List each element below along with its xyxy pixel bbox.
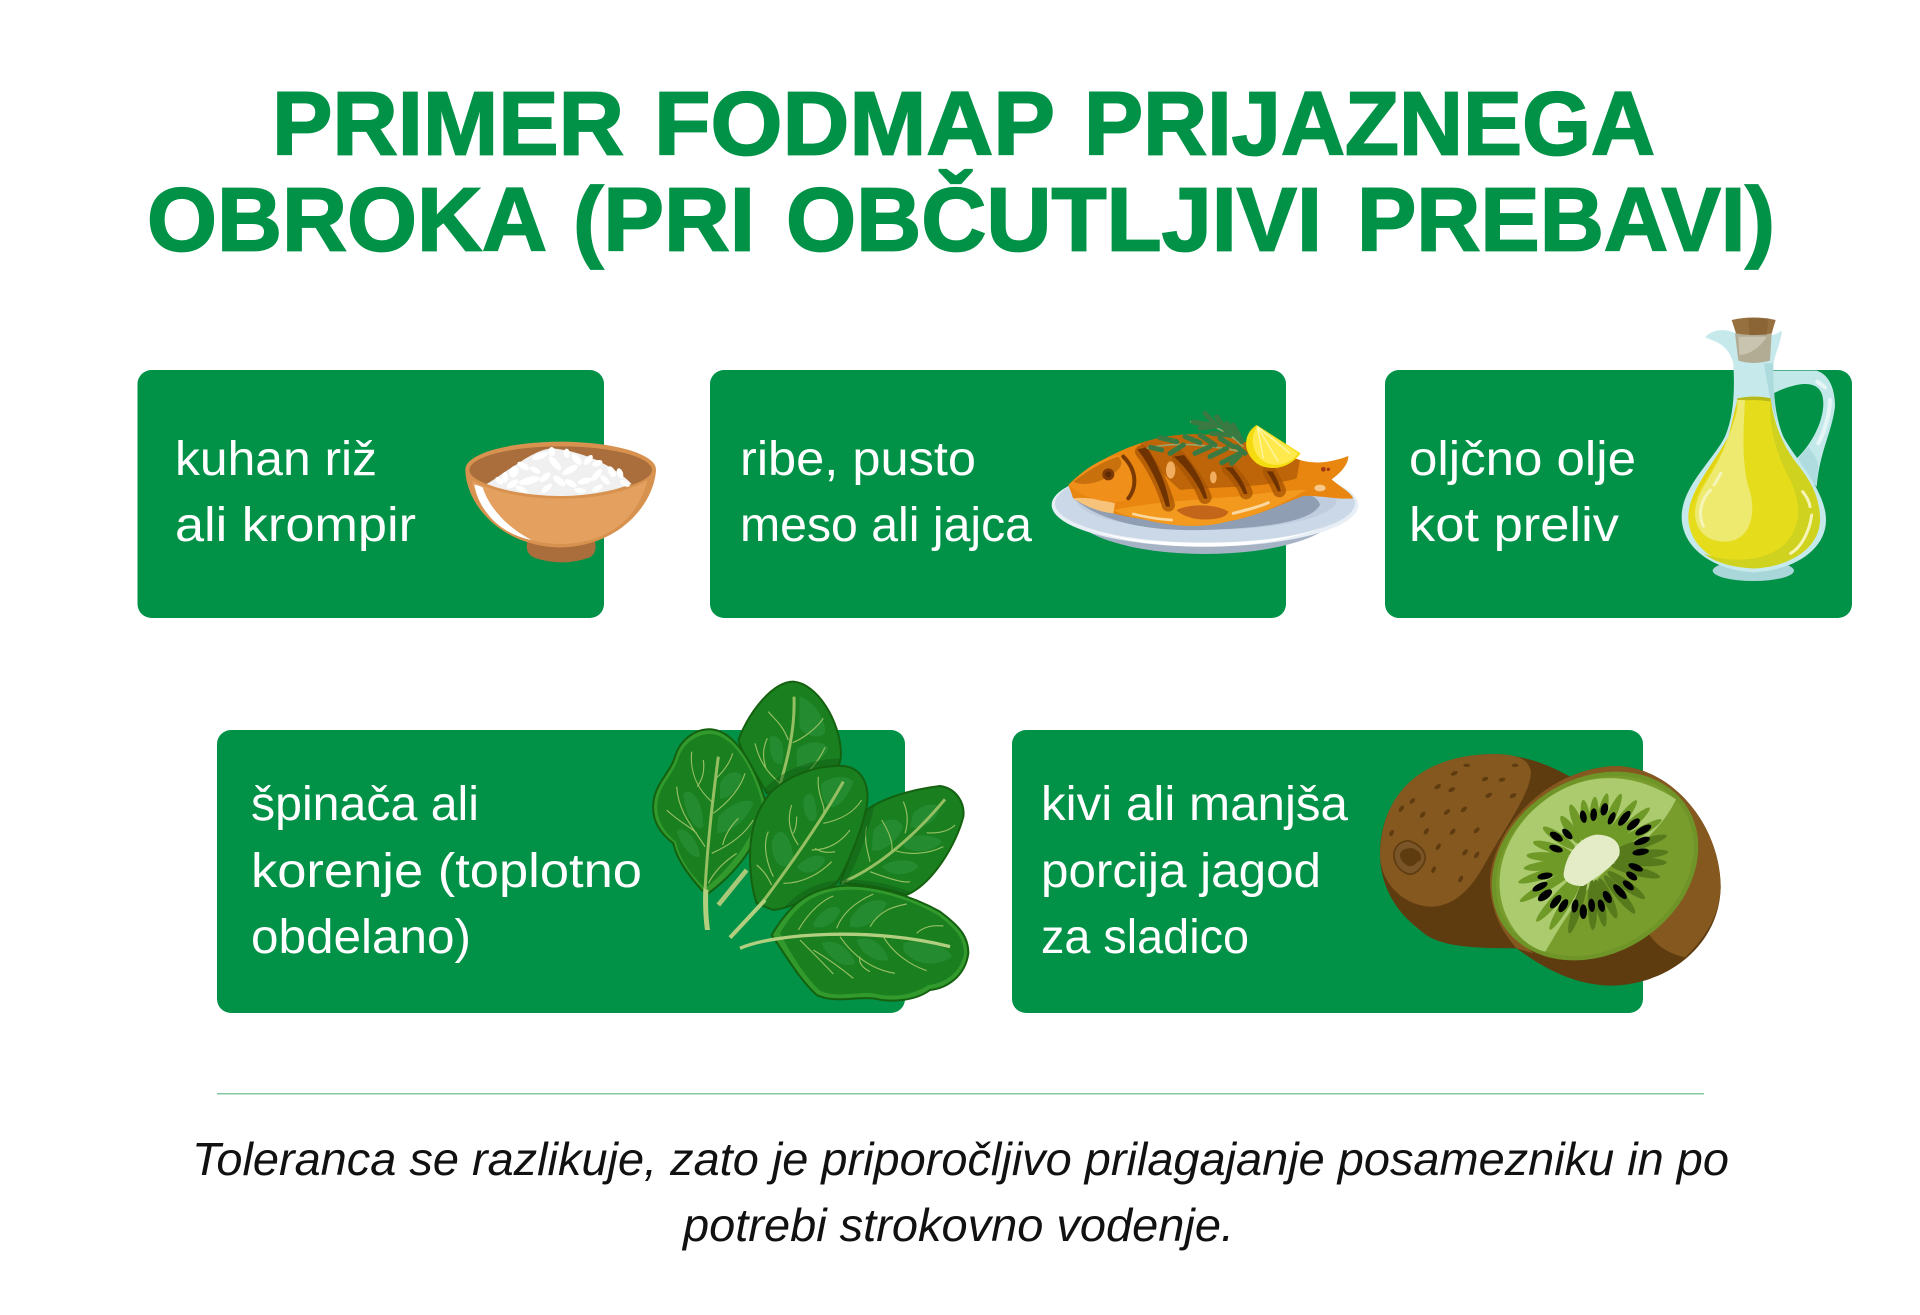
panel: kiwi or strawberries bbox=[1012, 730, 1734, 1013]
icon: kiwi fruit bbox=[1380, 733, 1734, 999]
panel: olive oil: oljčno olje bbox=[1409, 433, 1636, 486]
panel: fish, meat or eggs: meso ali jajca bbox=[740, 499, 1032, 552]
panel: spinach or carrots: špinača ali bbox=[251, 778, 479, 831]
panel: fish, meat or eggs bbox=[710, 370, 1358, 618]
title: PRIMER bbox=[272, 74, 624, 174]
panel: rice or potato bbox=[138, 370, 656, 618]
panel: spinach or carrots: korenje (toplotno bbox=[251, 845, 642, 898]
icon: grilled fish on a plate bbox=[1052, 413, 1358, 554]
panel: spinach or carrots bbox=[217, 682, 968, 1013]
icon: rice bowl bbox=[465, 442, 656, 562]
panel: olive oil bbox=[1385, 317, 1852, 618]
panel: olive oil: kot preliv bbox=[1409, 499, 1619, 552]
title: OBROKA bbox=[147, 170, 547, 270]
footer note: Toleranca se razlikuje, zato je priporočljivo prilagajanje posamezniku in po bbox=[192, 1133, 1729, 1185]
panel: kiwi or strawberries: za sladico bbox=[1041, 911, 1249, 964]
title: (PRI bbox=[573, 170, 755, 270]
footer note: potrebi strokovno vodenje. bbox=[681, 1199, 1234, 1251]
panel: spinach or carrots: obdelano) bbox=[251, 911, 471, 964]
panel: rice or potato: kuhan riž bbox=[175, 433, 377, 486]
title: PRIJAZNEGA bbox=[1084, 74, 1655, 174]
title: FODMAP bbox=[654, 74, 1055, 174]
title bbox=[147, 74, 1775, 270]
footer note bbox=[192, 1133, 1729, 1251]
title: PREBAVI) bbox=[1357, 170, 1775, 270]
panel: kiwi or strawberries: kivi ali manjša bbox=[1041, 778, 1348, 831]
panel: rice or potato: ali krompir bbox=[175, 499, 416, 552]
icon: spinach leaves bbox=[653, 682, 968, 1001]
panel: fish, meat or eggs: ribe, pusto bbox=[740, 433, 976, 486]
panel: kiwi or strawberries: porcija jagod bbox=[1041, 845, 1321, 898]
title: OBČUTLJIVI bbox=[786, 168, 1322, 270]
icon: oil jug bbox=[1682, 317, 1835, 581]
